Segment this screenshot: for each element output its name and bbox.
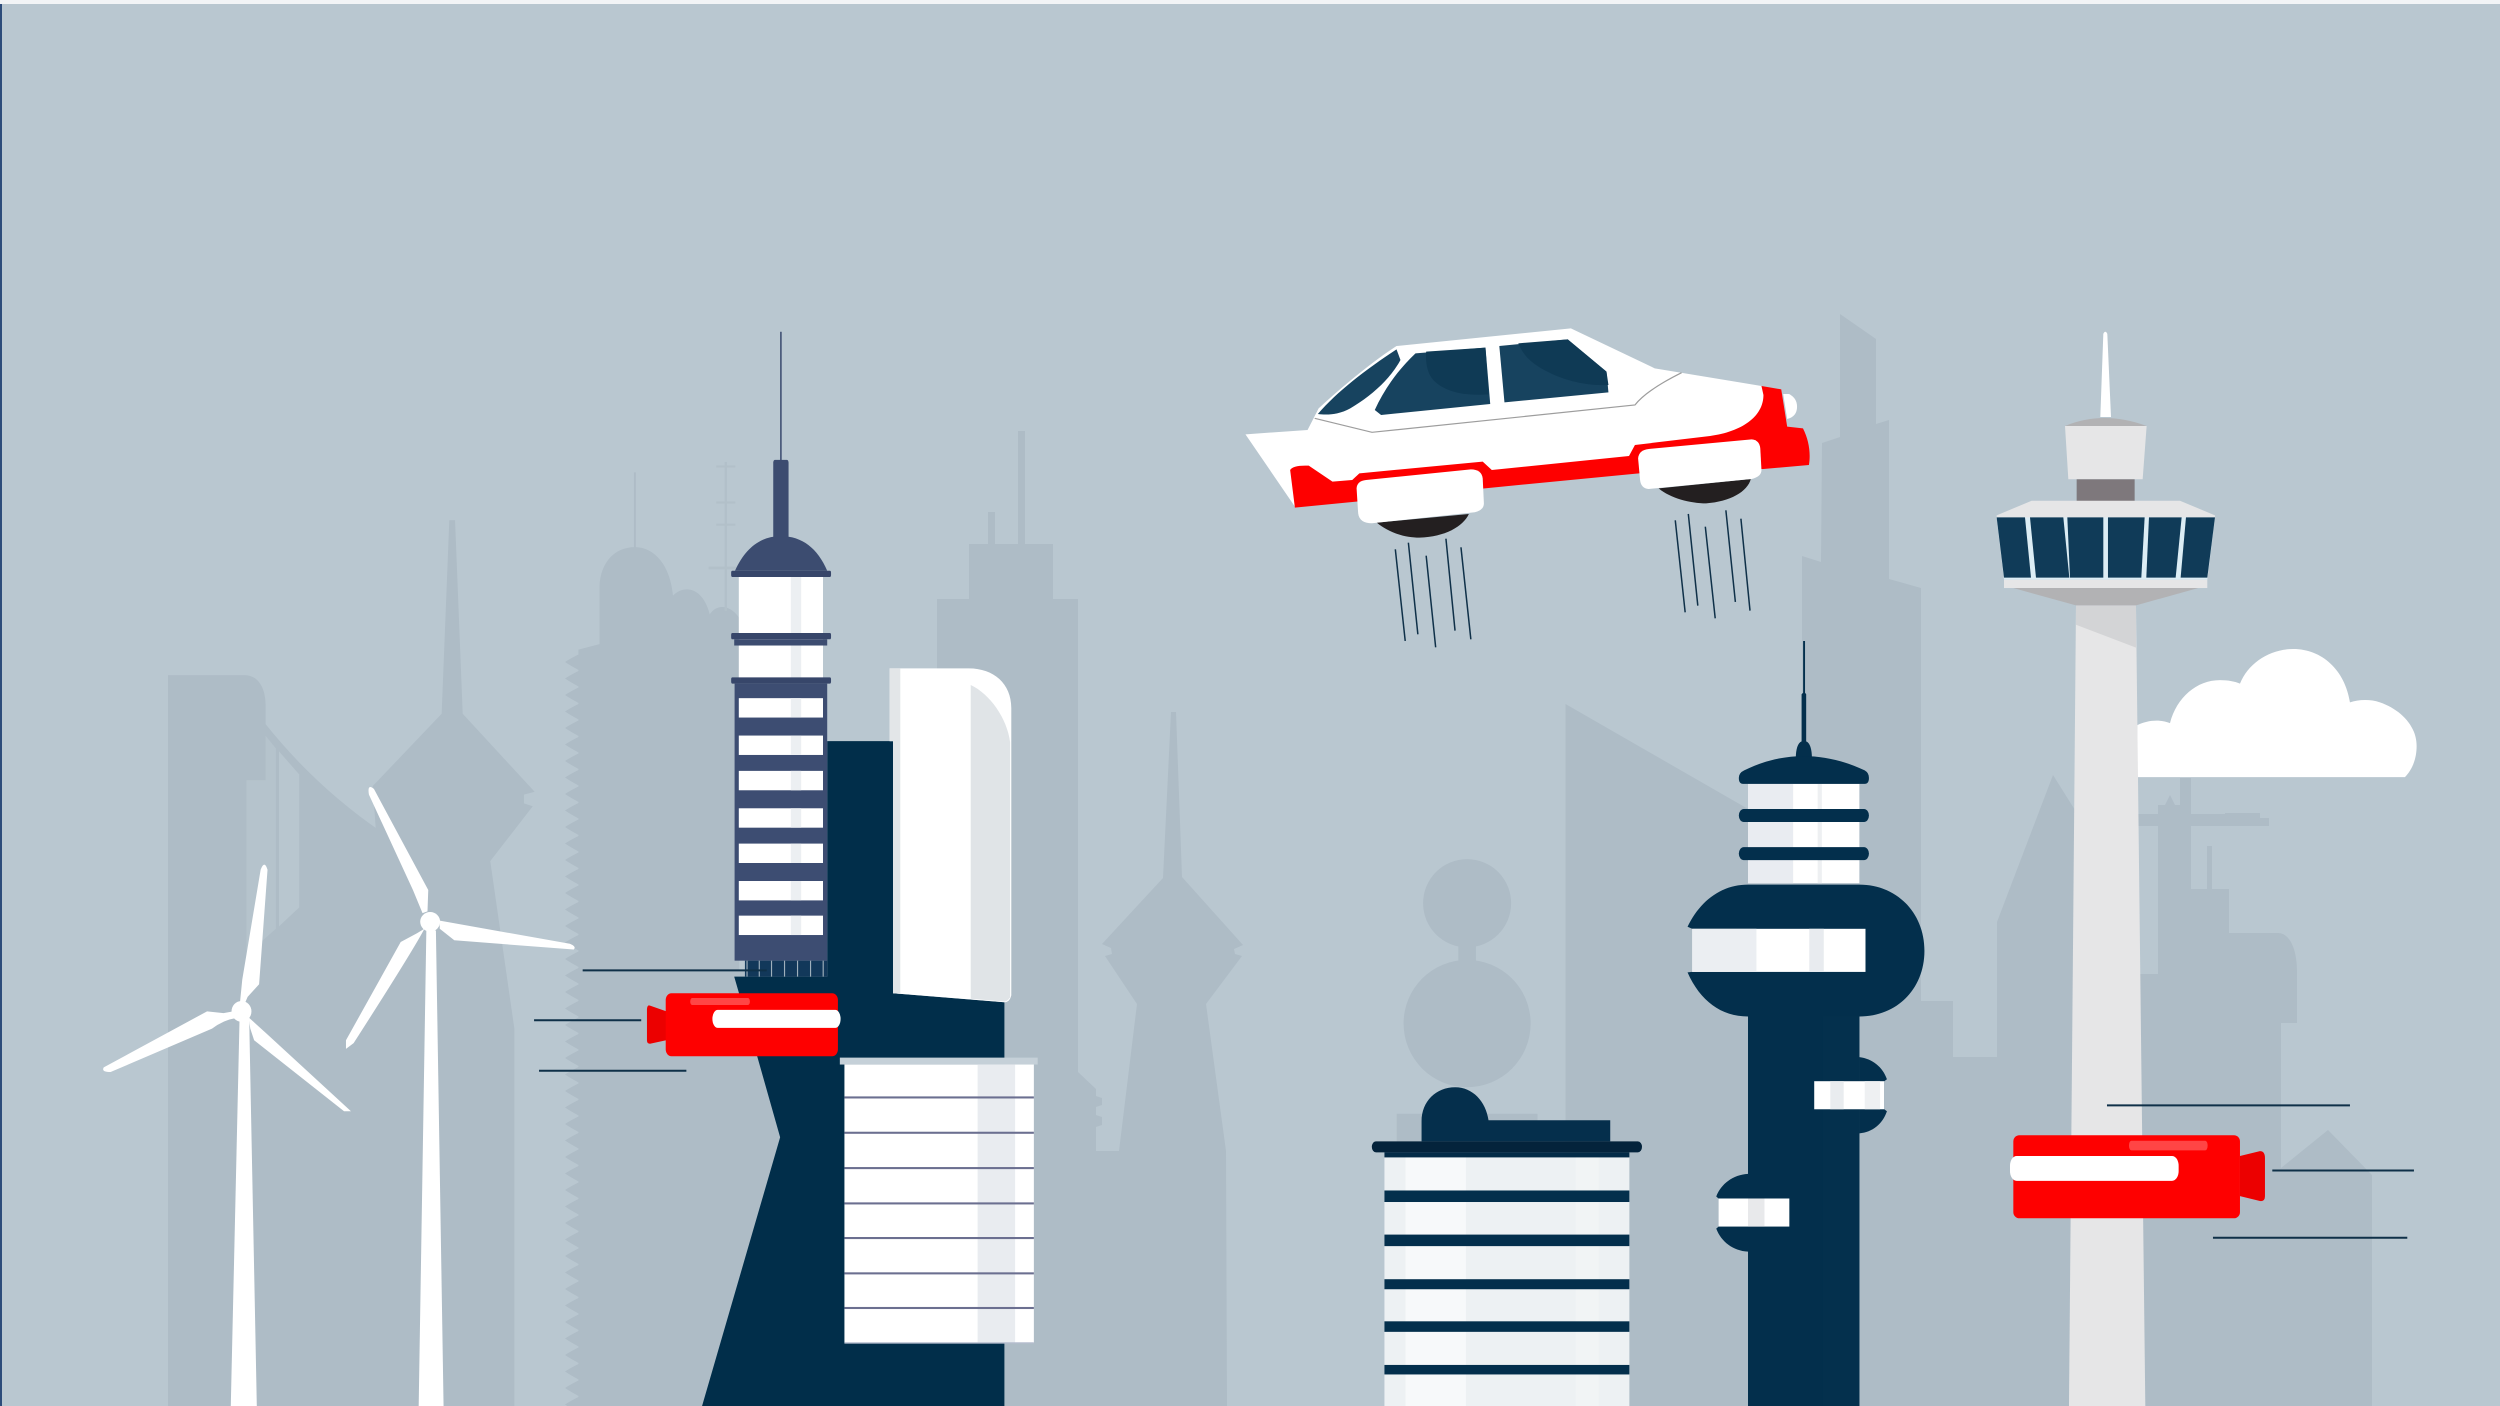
silhouette: stepped tower and second spired tower	[937, 431, 1243, 1406]
silhouette: serrated edge	[565, 654, 580, 1406]
striped facade	[1384, 1152, 1629, 1406]
background skyline silhouettes	[168, 314, 2372, 1406]
right flying pod	[2010, 1105, 2414, 1238]
cloud	[2137, 649, 2417, 777]
tail light	[1783, 394, 1797, 419]
right pod speed lines	[2107, 1105, 2414, 1238]
hover discs	[1377, 479, 1751, 538]
windows	[1318, 339, 1608, 415]
left building cluster	[534, 332, 1038, 1406]
shaft	[1748, 1011, 1859, 1406]
striped blue tower	[731, 332, 831, 977]
roof cap	[1372, 1141, 1642, 1152]
door line	[1315, 373, 1682, 432]
flying car	[1245, 328, 1810, 647]
centre rooftop building	[1372, 1087, 1642, 1406]
top edge strip	[0, 0, 2500, 4]
saucer deck	[1688, 885, 1924, 1017]
dome and roof block	[1422, 1087, 1610, 1141]
navy base building	[702, 741, 1004, 1406]
silhouette: right wedge, skyscraper and harbour mass	[1566, 314, 2372, 1406]
top turret	[1739, 756, 1869, 883]
left edge line	[0, 4, 2, 1406]
wind turbine left	[103, 865, 351, 1406]
red trim	[1290, 386, 1810, 508]
shaft	[2069, 605, 2145, 1406]
left flying pod	[647, 993, 841, 1056]
car body	[1245, 328, 1764, 507]
wheel covers	[1357, 439, 1761, 523]
wind turbine right	[346, 787, 575, 1406]
upper cap	[2065, 418, 2147, 501]
white control tower	[1997, 332, 2215, 1406]
left pod	[1716, 1174, 1789, 1252]
antenna and knob	[1796, 641, 1812, 758]
silhouette: figure-eight tower behind centre building	[1397, 859, 1538, 1144]
left pod speed lines	[534, 970, 767, 1071]
silhouette: left block, bridge and spired tower	[168, 520, 535, 1406]
spire	[2100, 332, 2111, 417]
observation deck	[1997, 501, 2215, 605]
right pod	[1814, 1057, 1887, 1133]
navy observation tower	[1688, 641, 1924, 1406]
upper white building	[890, 668, 1011, 1002]
thrust lines	[1395, 510, 1750, 647]
lower white striped building	[840, 1058, 1038, 1344]
silhouette: crane bar	[2138, 813, 2269, 826]
silhouette: domed serrated tower with masts	[578, 462, 806, 1406]
